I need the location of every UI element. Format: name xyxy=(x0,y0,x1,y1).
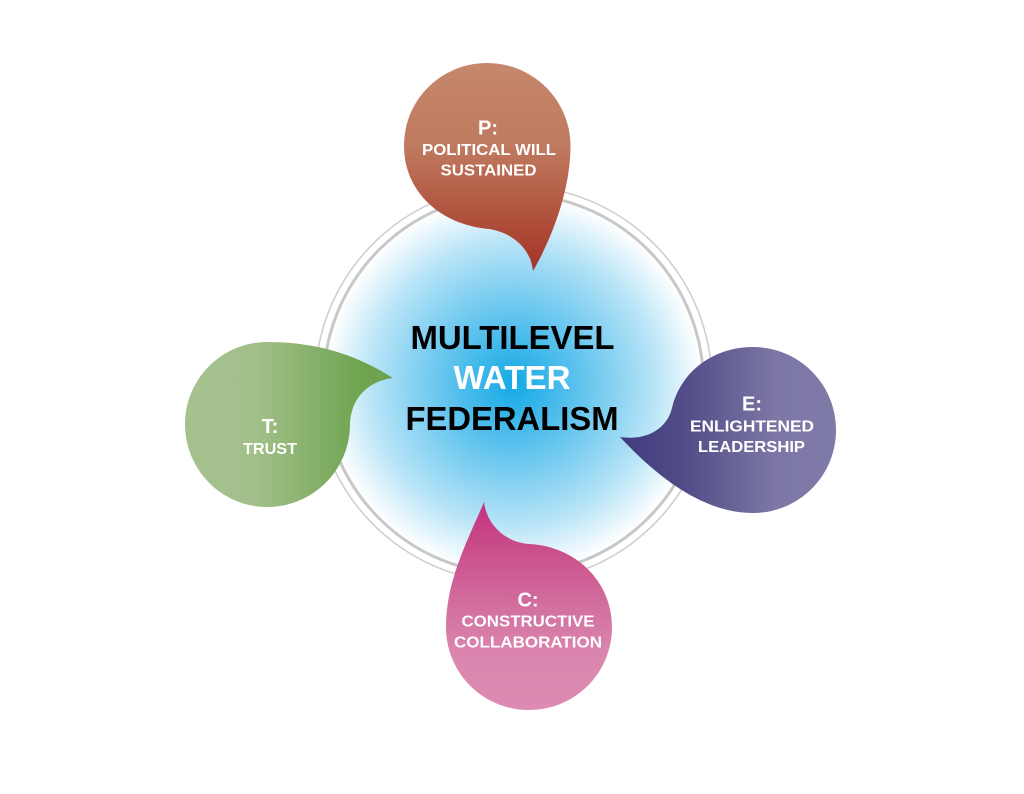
text: P: POLITICAL WILL xyxy=(422,142,556,159)
text: C: CONSTRUCTIVE xyxy=(462,614,595,630)
text: C: C: xyxy=(517,590,539,612)
central title: FEDERALISM xyxy=(406,400,618,437)
text: P xyxy=(422,118,556,180)
drop shape: C xyxy=(446,502,612,710)
text: C: COLLABORATION xyxy=(454,634,602,652)
panel: P political will sustained xyxy=(404,63,570,271)
inner ring xyxy=(324,194,704,574)
panel: E enlightened leadership xyxy=(620,347,836,513)
drop shape: T xyxy=(185,342,393,507)
text: E: E: xyxy=(742,394,762,416)
text: E xyxy=(690,394,814,456)
panel: C constructive collaboration xyxy=(446,502,612,710)
text: C xyxy=(454,590,602,652)
text: E: LEADERSHIP xyxy=(698,439,805,456)
central title: MULTILEVEL xyxy=(410,319,614,356)
panel: T trust xyxy=(185,342,393,507)
text: T xyxy=(243,416,297,458)
outer ring xyxy=(315,186,712,582)
text: P: P: xyxy=(478,118,498,140)
central title xyxy=(406,319,618,437)
text: T: T: xyxy=(262,416,278,438)
central water circle xyxy=(324,195,702,573)
text: E: ENLIGHTENED xyxy=(690,418,814,436)
drop shape: P xyxy=(404,63,570,271)
text: T: TRUST xyxy=(243,441,297,458)
central title: WATER xyxy=(454,359,571,396)
drop shape: E xyxy=(620,347,836,513)
text: P: SUSTAINED xyxy=(440,162,536,180)
